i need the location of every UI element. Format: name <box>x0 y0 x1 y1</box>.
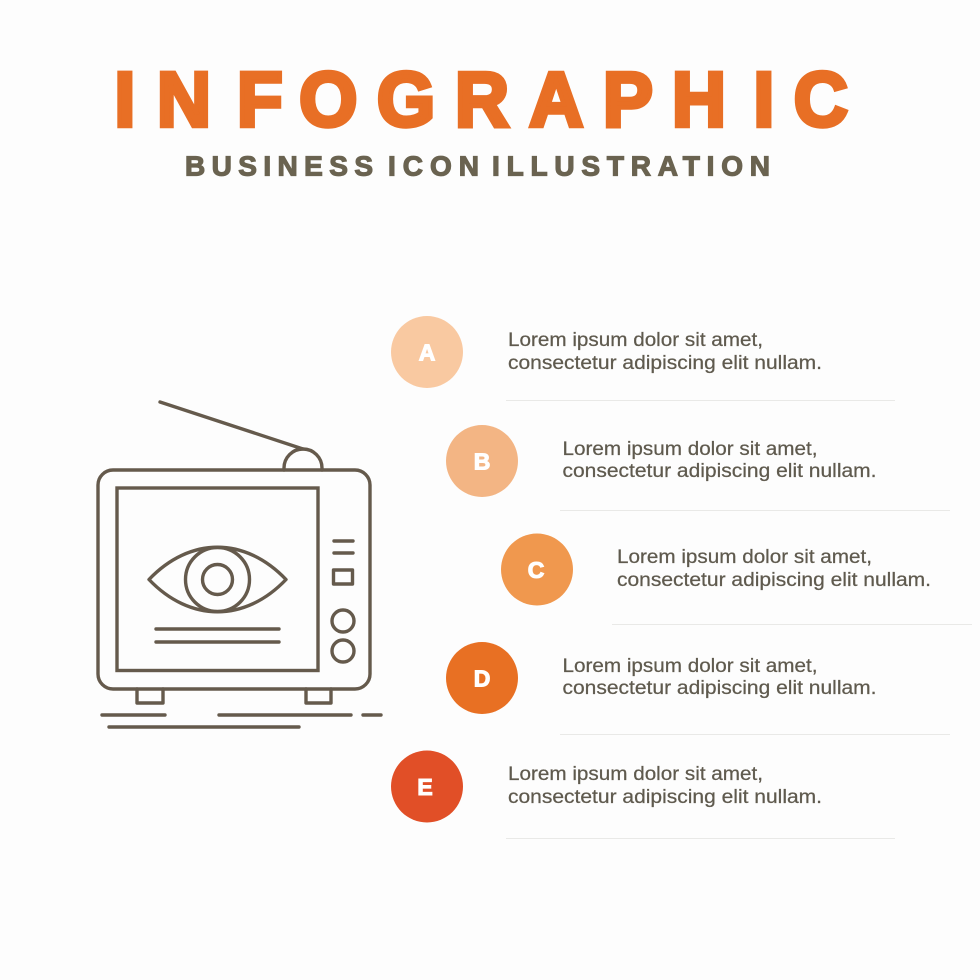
step C: consectetur adipiscing elit nullam. <box>617 569 931 591</box>
step B: Lorem ipsum dolor sit amet, <box>562 438 818 460</box>
step D: Lorem ipsum dolor sit amet, <box>562 655 818 677</box>
step C: C <box>528 557 544 583</box>
step E: consectetur adipiscing elit nullam. <box>508 786 822 808</box>
step A: A <box>419 340 435 366</box>
subtitle: ICON <box>388 150 479 182</box>
step E <box>391 750 895 839</box>
step A <box>391 316 895 401</box>
eye <box>149 547 286 612</box>
control buttons <box>332 541 354 662</box>
icon: television with eye <box>98 402 381 727</box>
tv feet <box>137 689 331 703</box>
step D: D <box>474 666 490 692</box>
step D <box>446 642 950 735</box>
antenna <box>160 402 322 470</box>
step B: B <box>474 448 490 474</box>
step B <box>446 425 950 511</box>
tv body <box>98 470 370 689</box>
step E: Lorem ipsum dolor sit amet, <box>508 763 763 785</box>
step D: consectetur adipiscing elit nullam. <box>562 677 876 699</box>
step A: consectetur adipiscing elit nullam. <box>508 352 822 374</box>
subtitle: ILLUSTRATION <box>492 150 770 182</box>
step C <box>501 534 972 625</box>
step A: Lorem ipsum dolor sit amet, <box>508 329 763 351</box>
screen text lines <box>156 629 279 642</box>
step C: Lorem ipsum dolor sit amet, <box>617 546 872 568</box>
subtitle: BUSINESS <box>185 150 373 182</box>
step B: consectetur adipiscing elit nullam. <box>562 460 876 482</box>
ground lines <box>102 715 381 727</box>
screen <box>117 488 318 670</box>
step E: E <box>417 774 433 800</box>
title: INFOGRAPHIC <box>114 57 848 143</box>
